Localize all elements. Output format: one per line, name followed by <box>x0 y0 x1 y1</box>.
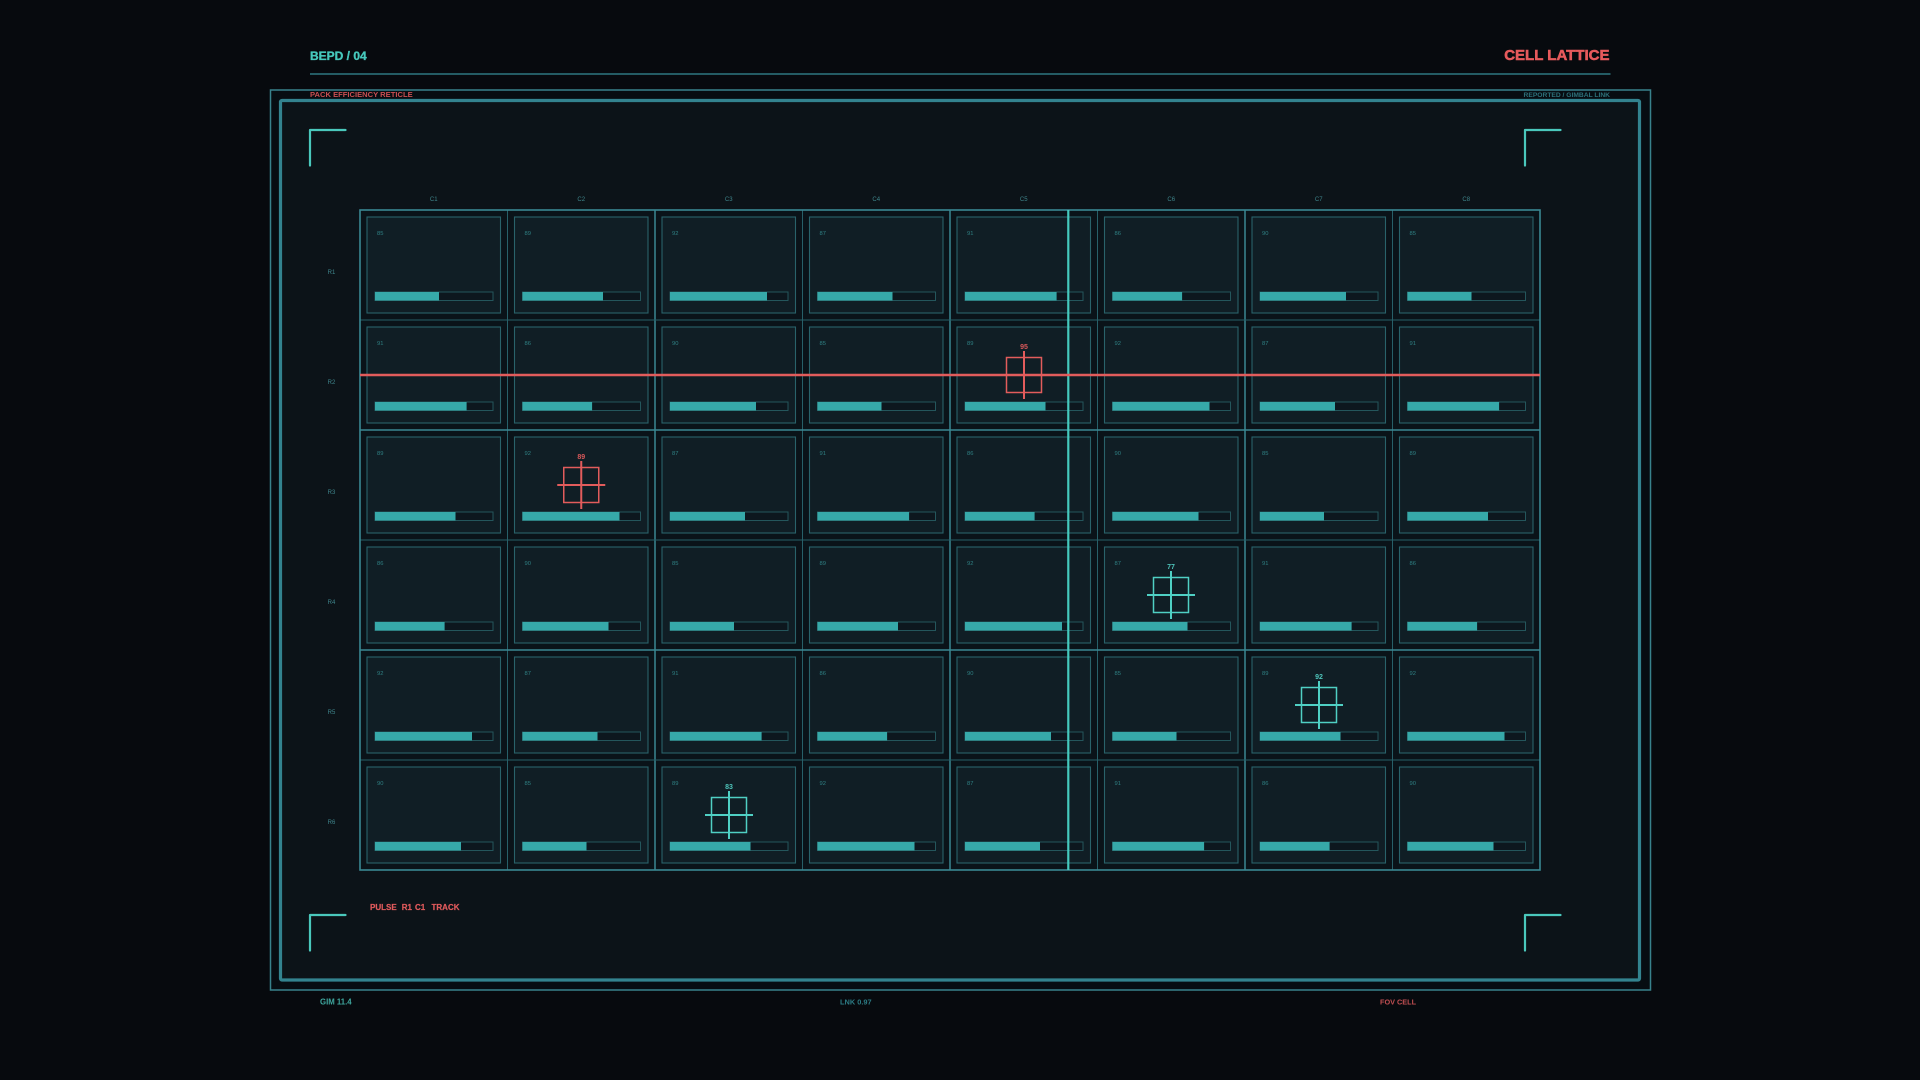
row labels: R3 <box>328 490 336 496</box>
cell R2 C5 <box>957 327 1090 423</box>
cell R4 C5 <box>957 547 1090 643</box>
callout: pulse track: C1 <box>415 903 426 912</box>
cell R3 C6 <box>1104 437 1238 533</box>
cell R6 C8 <box>1400 767 1533 863</box>
cell R4 C6 <box>1104 547 1238 643</box>
cell R6 C2 <box>514 767 648 863</box>
column labels: C2 <box>577 197 586 203</box>
cell R1 C8 <box>1400 217 1533 313</box>
cell R4 C8: 86 <box>1410 561 1416 567</box>
cell R4 C4 <box>810 547 943 643</box>
cell R5 C5 <box>957 657 1090 753</box>
cell R3 C5: 86 <box>967 451 973 457</box>
cell R6 C5: 87 <box>967 781 973 787</box>
tracking line: vertical teal <box>1067 210 1069 870</box>
cell R6 C7: 86 <box>1262 781 1268 787</box>
cell R2 C2: 86 <box>524 341 531 347</box>
row labels: R2 <box>328 380 336 386</box>
cell R2 C3 <box>662 327 796 423</box>
cell R2 C8 <box>1400 327 1533 423</box>
callout: pulse track: PULSE <box>370 903 397 912</box>
cell R1 C4: 87 <box>820 231 826 237</box>
subtitle: reported gimbal link: REPORTED / GIMBAL LINK <box>1524 92 1610 99</box>
cell R5 C2: 87 <box>524 671 531 677</box>
cell R4 C3: 85 <box>672 561 678 567</box>
cell R1 C1: 85 <box>377 231 383 237</box>
cell R6 C3 <box>662 767 796 863</box>
cell R4 C4: 89 <box>820 561 826 567</box>
subtitle: pack efficiency reticle: PACK EFFICIENCY RETICLE <box>310 90 413 99</box>
cell R2 C7 <box>1252 327 1386 423</box>
reticle: R5 C7 teal 92 <box>1295 674 1343 729</box>
corner bracket: bottom left <box>310 915 346 950</box>
column labels: C5 <box>1020 197 1028 203</box>
cell R3 C3: 87 <box>672 451 678 457</box>
cell R4 C5: 92 <box>967 561 973 567</box>
cell R1 C6 <box>1104 217 1238 313</box>
row labels: R4 <box>328 600 336 606</box>
cell R5 C2 <box>514 657 648 753</box>
reticle: R4 C6 teal 77: 77 <box>1167 564 1175 571</box>
reticle: R5 C7 teal 92: 92 <box>1315 674 1323 681</box>
reticle: R3 C2 red 89 <box>557 454 605 509</box>
reticle: R6 C3 teal 83 <box>705 784 753 839</box>
cell R3 C7: 85 <box>1262 451 1268 457</box>
column labels: C8 <box>1462 197 1471 203</box>
cell R2 C4 <box>810 327 943 423</box>
cell R4 C7 <box>1252 547 1386 643</box>
cell R2 C6: 92 <box>1114 341 1121 347</box>
cell R6 C2: 85 <box>524 781 531 787</box>
heading: cell lattice title: CELL LATTICE <box>1504 47 1610 64</box>
cell R6 C8: 90 <box>1410 781 1416 787</box>
cell R3 C1 <box>367 437 500 533</box>
cell R1 C5: 91 <box>967 231 973 237</box>
cell R4 C8 <box>1400 547 1533 643</box>
cell R4 C7: 91 <box>1262 561 1268 567</box>
cell R5 C6 <box>1104 657 1238 753</box>
cell R5 C5: 90 <box>967 671 973 677</box>
cell R6 C1: 90 <box>377 781 383 787</box>
cell R2 C5: 89 <box>967 341 973 347</box>
cell R6 C6: 91 <box>1114 781 1121 787</box>
cell R5 C6: 85 <box>1114 671 1121 677</box>
cell R1 C5 <box>957 217 1090 313</box>
cell R2 C4: 85 <box>820 341 826 347</box>
chart: cell lattice grid <box>360 210 1540 870</box>
heading: document code: BEPD / 04 <box>310 49 367 63</box>
panel: inner frame <box>280 100 1640 980</box>
cell R6 C4: 92 <box>820 781 826 787</box>
cell R1 C2 <box>514 217 648 313</box>
reticle: R2 C5 red 95 <box>1000 344 1048 399</box>
cell R1 C6: 86 <box>1114 231 1121 237</box>
cell R5 C3: 91 <box>672 671 678 677</box>
panel: outer frame <box>270 90 1650 990</box>
cell R5 C8: 92 <box>1410 671 1416 677</box>
cell R6 C3: 89 <box>672 781 678 787</box>
column labels <box>430 197 1471 203</box>
footer: link value: LNK 0.97 <box>840 998 872 1006</box>
corner bracket: bottom right <box>1525 915 1560 950</box>
tracking line: horizontal red <box>360 374 1540 376</box>
cell R5 C3 <box>662 657 796 753</box>
cell R6 C4 <box>810 767 943 863</box>
cell R3 C4 <box>810 437 943 533</box>
cell R4 C3 <box>662 547 796 643</box>
cell R3 C3 <box>662 437 796 533</box>
cell R3 C8: 89 <box>1410 451 1416 457</box>
cell R1 C3: 92 <box>672 231 678 237</box>
cell R3 C2: 92 <box>524 451 531 457</box>
cell R1 C8: 85 <box>1410 231 1416 237</box>
cell R4 C6: 87 <box>1114 561 1121 567</box>
cell R3 C6: 90 <box>1114 451 1121 457</box>
cell R6 C1 <box>367 767 500 863</box>
cell R2 C3: 90 <box>672 341 678 347</box>
column labels: C7 <box>1315 197 1323 203</box>
cell R2 C2 <box>514 327 648 423</box>
cell R3 C1: 89 <box>377 451 383 457</box>
cell R3 C2 <box>514 437 648 533</box>
cell R5 C4: 86 <box>820 671 826 677</box>
cell R5 C8 <box>1400 657 1533 753</box>
callout: pulse track: TRACK <box>432 903 460 912</box>
reticle: R6 C3 teal 83: 83 <box>725 784 733 791</box>
row labels <box>328 270 336 826</box>
cell R2 C1: 91 <box>377 341 383 347</box>
row labels: R5 <box>328 710 336 716</box>
cell R1 C3 <box>662 217 796 313</box>
column labels: C1 <box>430 197 438 203</box>
cell R4 C1 <box>367 547 500 643</box>
cell R1 C4 <box>810 217 943 313</box>
cell R2 C1 <box>367 327 500 423</box>
cell R3 C8 <box>1400 437 1533 533</box>
column labels: C4 <box>872 197 881 203</box>
row labels: R1 <box>328 270 336 276</box>
reticle: R4 C6 teal 77 <box>1147 564 1195 619</box>
cell R5 C7: 89 <box>1262 671 1268 677</box>
cell R4 C1: 86 <box>377 561 383 567</box>
cell R3 C7 <box>1252 437 1386 533</box>
cell R6 C7 <box>1252 767 1386 863</box>
callout: pulse track: R1 <box>402 903 412 912</box>
cell R5 C7 <box>1252 657 1386 753</box>
column labels: C6 <box>1167 197 1176 203</box>
cell R6 C6 <box>1104 767 1238 863</box>
column labels: C3 <box>725 197 733 203</box>
cell R1 C7 <box>1252 217 1386 313</box>
cell R1 C2: 89 <box>524 231 531 237</box>
row labels: R6 <box>328 820 336 826</box>
cell R1 C7: 90 <box>1262 231 1268 237</box>
corner bracket: top left <box>310 130 346 166</box>
cell R5 C1 <box>367 657 500 753</box>
reticle: R2 C5 red 95: 95 <box>1020 344 1028 351</box>
cell R5 C4 <box>810 657 943 753</box>
cell R2 C7: 87 <box>1262 341 1268 347</box>
cell R2 C8: 91 <box>1410 341 1416 347</box>
cell R4 C2: 90 <box>524 561 531 567</box>
corner bracket: top right <box>1525 130 1560 166</box>
cell R2 C6 <box>1104 327 1238 423</box>
cell R3 C5 <box>957 437 1090 533</box>
cell R1 C1 <box>367 217 500 313</box>
cell R3 C4: 91 <box>820 451 826 457</box>
cell R4 C2 <box>514 547 648 643</box>
footer: gimbal value: GIM 11.4 <box>320 998 352 1006</box>
reticle: R3 C2 red 89: 89 <box>577 454 585 461</box>
footer: field of view label: FOV CELL <box>1380 998 1417 1006</box>
cell R6 C5 <box>957 767 1090 863</box>
cell R5 C1: 92 <box>377 671 383 677</box>
